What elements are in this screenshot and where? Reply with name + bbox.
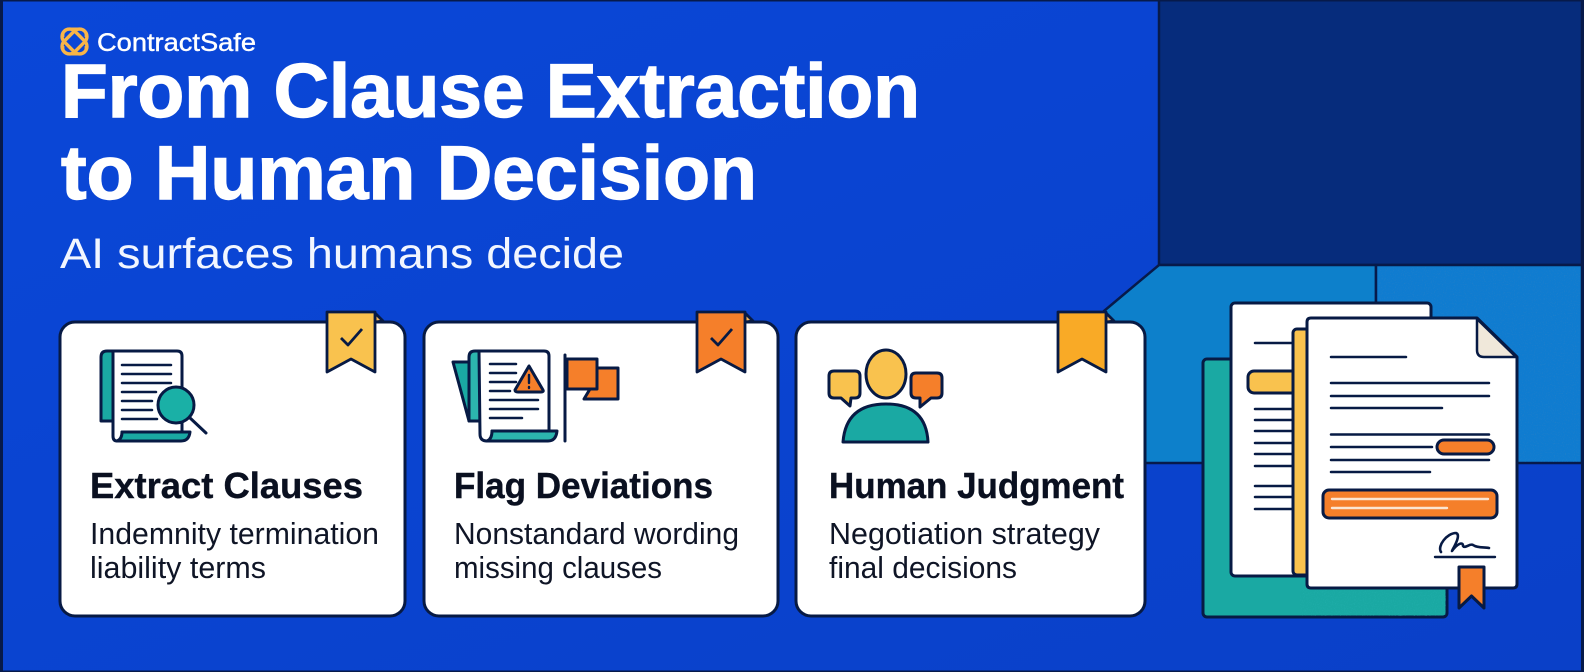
card heading: Flag Deviations (454, 465, 713, 506)
teal speckle texture (1300, 589, 1446, 616)
icon: document with warning and flag (453, 351, 618, 441)
panel: dark navy corner block (1159, 0, 1582, 265)
signature (1440, 533, 1489, 552)
large highlight (1323, 490, 1497, 518)
logo (59, 26, 256, 57)
white middle sheet (1231, 303, 1431, 576)
panel: light blue speckled block (1376, 265, 1582, 463)
panel: flag deviations card (424, 312, 778, 616)
icon: amber bookmark (1058, 312, 1114, 372)
title: From Clause Extraction (61, 49, 920, 134)
card description: Negotiation strategy (829, 516, 1100, 551)
logo wordmark: ContractSafe (97, 29, 256, 57)
speckle texture (1378, 267, 1580, 462)
title: to Human Decision (61, 131, 757, 216)
icon: document with magnifier (101, 351, 206, 441)
icon: person with speech bubbles (829, 350, 942, 442)
page fold (1477, 319, 1516, 357)
small highlight (1437, 440, 1494, 454)
illustration: stacked contract documents (1203, 303, 1517, 617)
ribbon seal (1459, 567, 1484, 608)
icon: bookmark with check (327, 312, 383, 372)
card heading: Human Judgment (829, 465, 1124, 506)
icon: orange bookmark with check (697, 312, 753, 372)
panel: extract clauses card (60, 312, 405, 616)
teal back sheet (1203, 359, 1447, 617)
panel: human judgment card (796, 312, 1145, 616)
front contract page (1307, 318, 1517, 588)
subtitle: AI surfaces humans decide (60, 230, 624, 278)
icon: logo mark (59, 26, 90, 57)
card description: liability terms (90, 550, 266, 585)
card description: Nonstandard wording (454, 516, 739, 551)
card description: missing clauses (454, 550, 662, 585)
yellow sheet edge (1293, 329, 1317, 575)
card description: final decisions (829, 550, 1017, 585)
card heading: Extract Clauses (90, 465, 363, 506)
panel: light blue angled block (1104, 265, 1376, 463)
card description: Indemnity termination (90, 516, 379, 551)
